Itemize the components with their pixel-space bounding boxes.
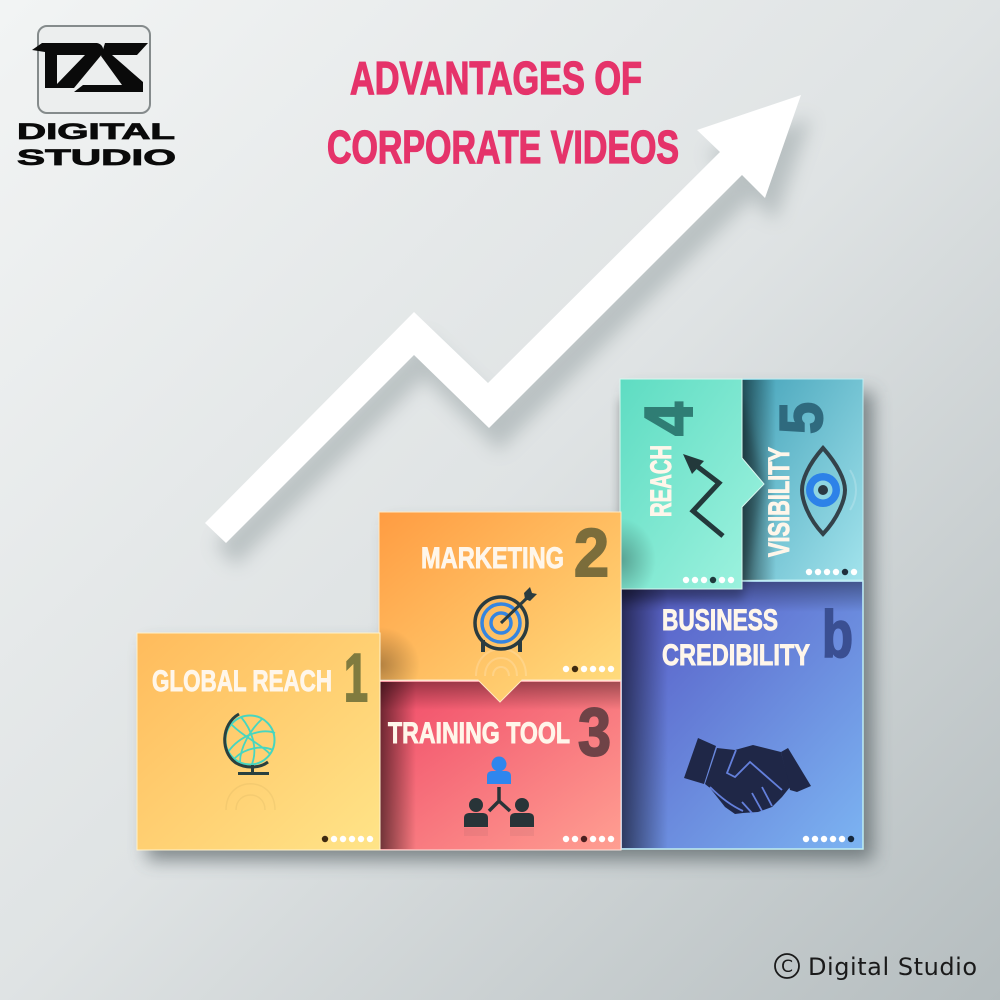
panel 1: global reach — [137, 633, 380, 850]
icon: zigzag arrow — [683, 454, 723, 536]
arrow shadow — [215, 118, 811, 566]
panel 4: reach — [620, 378, 765, 590]
number 2: 2 — [574, 515, 609, 591]
label: visibility: VISIBILITY — [763, 447, 796, 557]
logo: STUDIO — [17, 145, 176, 170]
dots — [683, 577, 734, 583]
copyright: C — [781, 957, 793, 977]
icon: eye — [802, 448, 856, 534]
label: business credibility: CREDIBILITY — [662, 639, 810, 672]
panel 5: visibility — [742, 379, 863, 580]
title: ADVANTAGES OF — [350, 52, 642, 104]
panel 3: training tool — [379, 681, 621, 850]
number 1: 1 — [344, 640, 368, 716]
icon: globe — [225, 714, 275, 810]
icon: handshake — [684, 738, 811, 814]
logo: DIGITAL — [17, 119, 175, 144]
number 4: 4 — [631, 402, 707, 436]
label: global reach: GLOBAL REACH — [152, 665, 332, 698]
label: training tool: TRAINING TOOL — [388, 717, 570, 750]
dots — [563, 666, 614, 672]
label: business credibility: BUSINESS — [662, 604, 778, 637]
panel 4 shadow — [620, 400, 764, 600]
number 5: 5 — [768, 402, 835, 434]
logo — [17, 26, 176, 170]
dots — [806, 569, 857, 575]
dots — [803, 836, 854, 842]
icon: team — [464, 756, 534, 836]
label: reach: REACH — [645, 445, 678, 517]
number 6: b — [822, 597, 853, 671]
number 3: 3 — [578, 694, 611, 770]
dots — [322, 836, 373, 842]
panel 2: marketing — [378, 512, 622, 703]
growth arrow — [205, 95, 801, 543]
label: marketing: MARKETING — [421, 542, 564, 575]
panel 6: business credibility — [621, 581, 863, 849]
label: business credibility — [662, 604, 810, 672]
title — [327, 52, 679, 173]
title: CORPORATE VIDEOS — [327, 121, 679, 173]
dots — [563, 836, 614, 842]
stairs shadow — [147, 392, 873, 860]
icon: target — [475, 587, 537, 676]
copyright: Digital Studio — [808, 953, 977, 981]
